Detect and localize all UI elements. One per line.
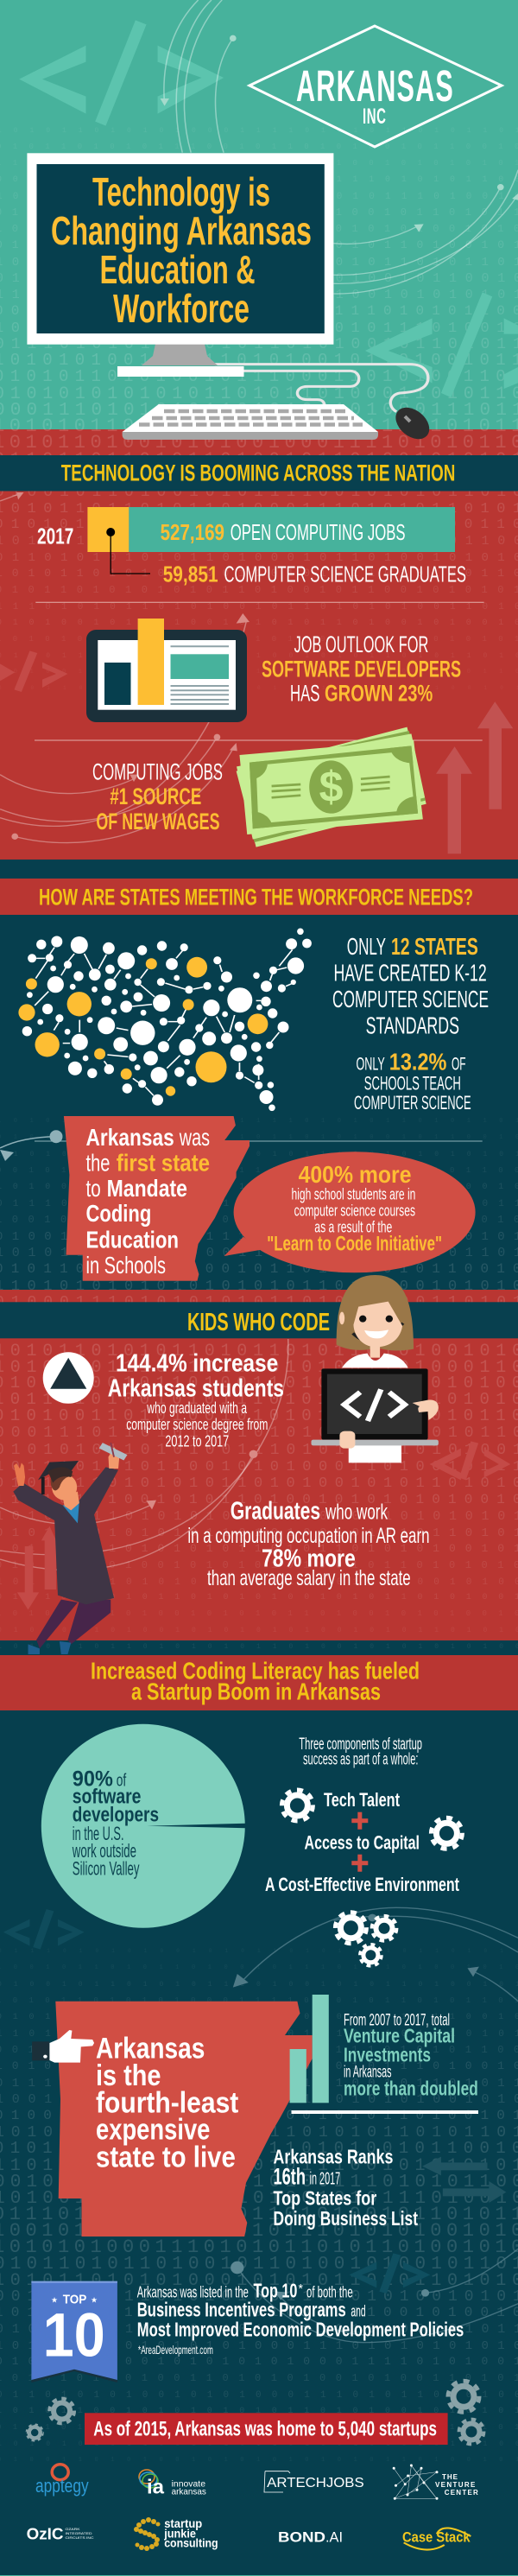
text: Arkansas ranks 16th: Top States for [273, 2186, 376, 2209]
icon: top 10 ribbon [31, 2281, 117, 2382]
text: computing jobs: #1 SOURCE [110, 784, 201, 809]
text: graduates earn more: than average salary in the state [207, 1566, 411, 1590]
icon: top 10 ribbon: TOP [63, 2293, 86, 2307]
text: listed in the top 10: *AreaDevelopment.com [138, 2343, 213, 2357]
callout: 400% more speech bubble: as a result of the [314, 1219, 392, 1236]
deco: horizontal arrows, brackets and arcs [231, 2157, 518, 2343]
panel: Arkansas first state [64, 1116, 250, 1281]
panel: Arkansas first state: Coding [86, 1200, 151, 1227]
text: listed in the top 10: * [299, 2281, 303, 2296]
icon: tablet with bar chart [86, 619, 247, 722]
text: graduates earn more: 78% more [262, 1545, 356, 1572]
logo: startup junkie consulting: junkie [163, 2526, 196, 2540]
text: job outlook [262, 631, 461, 707]
logo: the venture center: VENTURE [435, 2481, 476, 2489]
logo: startup junkie consulting: consulting [164, 2535, 218, 2549]
text: computing jobs: COMPUTING JOBS [92, 759, 223, 785]
logo: apptegy [35, 2465, 89, 2497]
monitor screen [36, 164, 325, 333]
text: only 12 states: 12 STATES [391, 933, 478, 960]
stat: 2017 jobs vs graduates bar: 59,851 [163, 561, 218, 587]
text: 144.4% increase: 2012 to 2017 [165, 1431, 229, 1450]
text: 144.4% increase [108, 1349, 284, 1450]
text: venture capital investments [344, 2011, 478, 2100]
logo: BOND.AI: .AI [325, 2529, 343, 2546]
text: Arkansas ranks 16th: in 2017 [310, 2169, 340, 2188]
panel: Arkansas first state: Arkansas [86, 1124, 174, 1151]
logo: OzIC: INTEGRATED [66, 2531, 92, 2535]
text: Arkansas ranks 16th: 16th [273, 2163, 306, 2189]
text: three components of startup success [265, 1735, 459, 1895]
logo: the venture center: CENTER [445, 2489, 478, 2497]
bar: open jobs [129, 507, 455, 552]
text: only 13.2% of schools [354, 1048, 471, 1114]
logo: the venture center [393, 2464, 478, 2500]
Arkansas state shape [64, 1116, 250, 1281]
text: three components of startup success: success as part of a whole: [303, 1751, 418, 1769]
logo: Arkansas Inc diamond: INC [363, 105, 386, 129]
title: Changing Arkansas [51, 208, 312, 253]
icon: white circle with triangle [43, 1352, 94, 1404]
text: job outlook: JOB OUTLOOK FOR [294, 631, 428, 657]
callout: 400% more speech bubble [224, 1152, 476, 1272]
text: Arkansas ranks 16th [273, 2145, 418, 2230]
logo: OzIC: OZARK [66, 2527, 80, 2531]
callout: 400% more speech bubble: computer science courses [294, 1202, 415, 1219]
text: venture capital investments: Investments [344, 2044, 431, 2066]
pie chart: 90% of software developers: developers [73, 1803, 159, 1826]
text: listed in the top 10: and [351, 2302, 366, 2320]
pie chart: 90% of software developers: of [117, 1771, 127, 1790]
icon: top 10 ribbon: ★ [91, 2296, 98, 2305]
pie chart: 90% of software developers: in the U.S. [73, 1823, 124, 1844]
callout: 400% more speech bubble: 400% more [299, 1161, 411, 1188]
text: listed in the top 10 [137, 2279, 464, 2357]
logo: OzIC: CIRCUITS INC [66, 2535, 94, 2540]
logo: CaseStack: Case Stack [402, 2528, 471, 2545]
cables [215, 365, 428, 412]
panel: Arkansas first state: the [86, 1150, 110, 1177]
text: graduates earn more [187, 1497, 430, 1590]
pie chart: 90% of software developers [41, 1724, 246, 1928]
panel: Arkansas first state: Education [86, 1226, 179, 1253]
text: only 12 states: STANDARDS [366, 1012, 459, 1039]
logo: innovate arkansas: ia [147, 2476, 164, 2498]
text: 144.4% increase: computer science degree from [126, 1415, 268, 1433]
panel: Arkansas first state: in Schools [86, 1252, 166, 1278]
text: only 13.2% of schools: 13.2% [389, 1048, 446, 1075]
heading band: kids who code [0, 1302, 518, 1338]
panel: Arkansas first state: was [179, 1124, 210, 1151]
text: listed in the top 10: Business Incentives Programs [137, 2299, 346, 2321]
panel: Arkansas first state: first state [117, 1150, 210, 1177]
logo: BOND.AI [278, 2529, 343, 2546]
icon: top 10 ribbon: ★ [51, 2296, 58, 2305]
text: listed in the top 10: Arkansas was listed in the [137, 2282, 249, 2300]
logo: startup junkie consulting [134, 2516, 218, 2551]
text: three components of startup success: Three components of startup [299, 1735, 422, 1754]
pie chart: 90% of software developers: software [73, 1786, 141, 1809]
panel: Arkansas fourth-least expensive: expensive [96, 2114, 210, 2147]
heading: technology is booming [0, 455, 518, 491]
stat: 2017 jobs vs graduates bar: 2017 [37, 523, 73, 549]
monitor frame [27, 153, 333, 345]
text: three components of startup success: Access to Capital [304, 1831, 420, 1853]
pie chart: 90% of software developers: work outside [72, 1840, 136, 1862]
text: 144.4% increase: Arkansas students [108, 1375, 284, 1403]
logo: CaseStack [402, 2528, 471, 2550]
heading band: kids who code: KIDS WHO CODE [187, 1309, 330, 1336]
callout: 400% more speech bubble: "Learn to Code Initiative" [267, 1232, 442, 1255]
dark section deco: brackets and arcs [3, 1907, 518, 2002]
logo: ARTECHJOBS: ARTECHJOBS [267, 2476, 364, 2490]
header deco: code brackets and arcs [19, 0, 518, 397]
stat: 2017 jobs vs graduates bar: 527,169 [161, 519, 224, 545]
text: three components of startup success: Tech Talent [324, 1789, 400, 1811]
logo: OzIC: OzIC [27, 2525, 64, 2542]
icon: grey gears [27, 2381, 483, 2444]
logo: ARTECHJOBS [264, 2471, 364, 2492]
text: venture capital investments: From 2007 to 2017, total [344, 2011, 450, 2029]
text: venture capital investments: Venture Capital [344, 2024, 455, 2046]
panel: Arkansas first state: Mandate [107, 1175, 187, 1202]
title: Education & [100, 247, 256, 292]
mouse [389, 401, 435, 446]
computer with cables, keyboard and mouse [27, 153, 435, 446]
stat: 2017 jobs vs graduates bar: OPEN COMPUTING JOBS [231, 519, 406, 545]
red section deco: arcs, code brackets and arrows [0, 492, 250, 843]
logo: innovate arkansas: arkansas [172, 2487, 206, 2497]
panel: Arkansas fourth-least expensive: is the [96, 2059, 161, 2092]
Arkansas state shape [55, 2002, 313, 2237]
text: venture capital investments: more than doubled [344, 2078, 478, 2100]
title: Workforce [113, 286, 250, 331]
US map of network dots [18, 928, 312, 1111]
monitor stand [142, 344, 218, 365]
logo: Arkansas Inc diamond: ARKANSAS [296, 61, 453, 111]
heading: increased coding literacy [91, 1657, 420, 1704]
icon: red plus signs [351, 1812, 368, 1872]
illustration: girl holding laptop [312, 1275, 439, 1462]
icon: pointing hand [32, 2030, 94, 2063]
bar chart: venture capital doubled [290, 1995, 478, 2114]
icon: white gears [281, 1790, 462, 1966]
panel: Arkansas fourth-least expensive [32, 2002, 313, 2237]
logo: apptegy: apptegy [35, 2475, 89, 2497]
panel: Arkansas fourth-least expensive: state to live [96, 2141, 236, 2173]
callout: 400% more speech bubble: high school students are in [292, 1185, 415, 1202]
text: job outlook: HAS [290, 681, 319, 707]
panel: Arkansas first state: to [86, 1175, 101, 1202]
logo: OzIC [27, 2525, 94, 2542]
text: Arkansas ranks 16th: Doing Business List [273, 2207, 418, 2230]
text: only 12 states: ONLY [347, 933, 386, 960]
text: Arkansas ranks 16th: Arkansas Ranks [273, 2145, 393, 2167]
text: computing jobs [92, 759, 223, 834]
illustration: graduate in gown [13, 1443, 125, 1654]
logo: the venture center: THE [442, 2473, 458, 2481]
logo: innovate arkansas: innovate [172, 2479, 205, 2489]
text: graduates earn more: who work [325, 1500, 388, 1524]
title: Technology is [92, 169, 270, 214]
pie chart: 90% of software developers: 90% [73, 1767, 113, 1791]
big up arrows [436, 701, 513, 853]
icon: top 10 ribbon: 10 [43, 2302, 105, 2370]
text: job outlook: GROWN 23% [325, 681, 433, 707]
logo: innovate arkansas [139, 2470, 206, 2498]
keyboard [123, 404, 378, 440]
icon: stack of dollar bills [231, 727, 439, 847]
text: listed in the top 10: Top 10 [254, 2279, 297, 2301]
bar: graduates share [87, 507, 129, 552]
stat: 2017 jobs vs graduates bar [37, 507, 466, 587]
text: only 13.2% of schools: OF [452, 1054, 466, 1074]
monitor base [117, 366, 243, 377]
pie chart: 90% of software developers: Silicon Valley [73, 1858, 140, 1880]
text: graduates earn more: Graduates [231, 1497, 320, 1525]
logo: Arkansas Inc diamond [250, 26, 502, 147]
text: venture capital investments: in Arkansas [344, 2063, 392, 2081]
text: only 13.2% of schools: ONLY [356, 1054, 385, 1074]
divider and arc behind Arkansas shape [0, 1130, 483, 1161]
heading: increased coding literacy: a Startup Boom in Arkansas [131, 1678, 381, 1704]
kids section arcs and deco [0, 1339, 510, 1609]
logo: startup junkie consulting: startup [164, 2516, 202, 2530]
text: 144.4% increase: who graduated with a [147, 1399, 247, 1417]
text: 144.4% increase: 144.4% increase [116, 1349, 278, 1377]
heading: increased coding literacy: Increased Coding Literacy has fueled [91, 1657, 420, 1684]
icon: stack of dollar bills: $ [319, 763, 344, 811]
text: computing jobs: OF NEW WAGES [96, 809, 220, 834]
callout: 5,040 startups banner [85, 2413, 448, 2445]
logo: BOND.AI: BOND [278, 2529, 325, 2546]
panel: Arkansas fourth-least expensive: fourth-least [96, 2087, 238, 2120]
text: only 12 states [332, 933, 489, 1039]
title [51, 169, 312, 331]
text: listed in the top 10: of both the [306, 2282, 353, 2300]
panel: Arkansas fourth-least expensive: Arkansas [96, 2033, 205, 2065]
